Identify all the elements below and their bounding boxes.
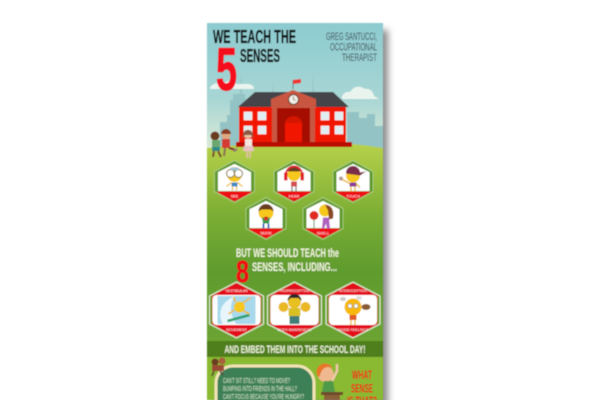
title: 5 (216, 36, 237, 103)
hexagon: hear (274, 160, 314, 202)
chalkboard: BUMPING INTO FRIENDS IN THE HALL? (223, 386, 297, 393)
hexagon: proprioception (268, 282, 322, 338)
what sense is that (347, 368, 377, 400)
hexagon: vestibular: MOVEMENT (226, 328, 248, 332)
author: THERAPIST (342, 52, 377, 64)
author (326, 31, 377, 64)
lower green panel (207, 357, 383, 400)
banner (207, 341, 383, 357)
hexagon: vestibular (210, 282, 264, 338)
title: WE TEACH THE (213, 27, 296, 47)
hexagon: interoception: INSIDE FEELINGS (338, 328, 369, 332)
title: SENSES (240, 46, 280, 66)
number 8: 8 (236, 254, 249, 289)
panel shadow (213, 30, 388, 400)
grass background (207, 142, 383, 400)
poster (207, 23, 383, 400)
hexagon: touch: TOUCH (346, 194, 360, 198)
running kids (212, 358, 226, 376)
author: GREG SANTUCCI, (326, 31, 377, 43)
what sense is that: SENSE (351, 382, 373, 396)
three more senses hexagons (210, 282, 380, 338)
boy with raised hand at desk (316, 363, 343, 400)
clouds (210, 81, 379, 99)
what sense is that: WHAT (352, 368, 372, 382)
heading: but we should teach: SENSES, INCLUDING... (252, 260, 337, 274)
hexagon: see: SEE (231, 194, 239, 198)
hexagon: hear: HEAR (289, 194, 300, 198)
hexagon: taste (246, 198, 286, 240)
city skyline (220, 72, 383, 150)
author: OCCUPATIONAL (330, 42, 377, 54)
hexagon: vestibular: VESTIBULAR (225, 289, 248, 293)
hexagon: interoception: INTEROCEPTION (339, 289, 367, 293)
chalkboard: CAN'T SIT STILL? NEED TO MOVE? (223, 378, 290, 385)
hexagon: smell (303, 198, 343, 240)
title (213, 27, 296, 103)
banner: AND EMBED THEM INTO THE SCHOOL DAY! (224, 344, 366, 356)
five senses hexagons (214, 160, 373, 240)
heading: but we should teach: BUT WE SHOULD TEACH the (236, 246, 339, 260)
children (210, 129, 254, 158)
hexagon: see (214, 160, 254, 202)
hexagon: interoception (326, 282, 380, 338)
hexagon: proprioception: PROPRIOCEPTION (280, 289, 310, 293)
chalkboard (216, 366, 314, 400)
hexagon: smell: SMELL (317, 232, 329, 236)
hexagon: touch (333, 160, 373, 202)
school building (236, 79, 352, 147)
heading: but we should teach (236, 246, 339, 274)
sky background (207, 23, 383, 150)
hexagon: proprioception: BODY AWARENESS (278, 328, 312, 332)
hexagon: taste: TASTE (260, 232, 272, 236)
